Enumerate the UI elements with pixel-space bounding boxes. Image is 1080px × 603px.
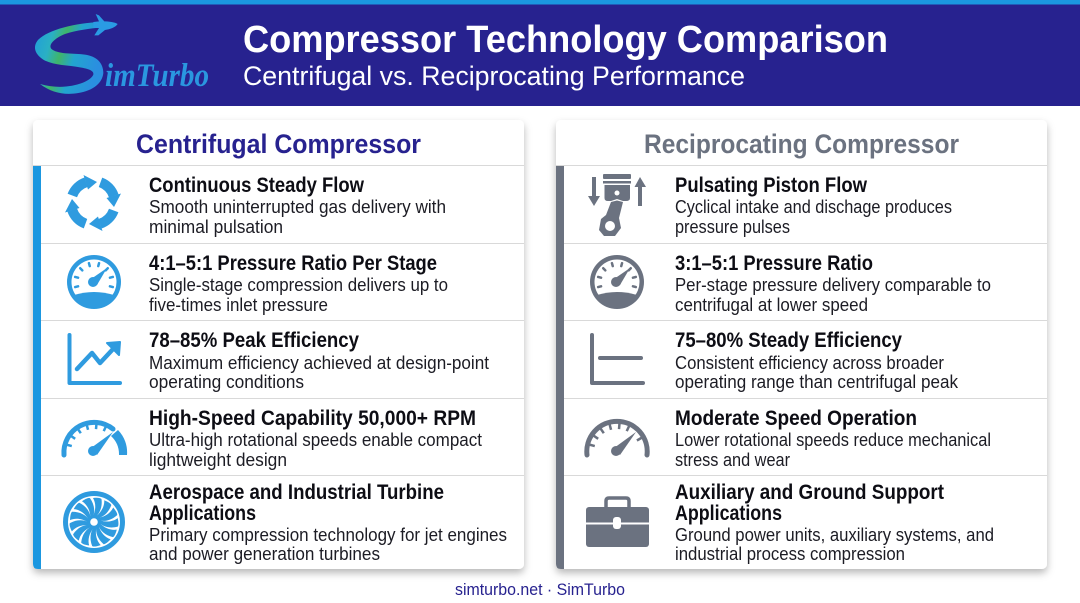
row: auxiliary applications: Auxiliary and Ground Support: [675, 481, 944, 504]
panel: centrifugal compressor: [33, 120, 524, 569]
row: auxiliary applications: Applications: [675, 502, 782, 525]
row: aerospace applications: Primary compression technology for jet engines: [149, 525, 507, 545]
row: continuous steady flow: Continuous Steady Flow: [149, 174, 365, 197]
row: steady efficiency: [592, 329, 959, 392]
row: pressure ratio: [67, 252, 448, 315]
footer: simturbo.net · SimTurbo: [455, 580, 625, 599]
row: moderate speed: Moderate Speed Operation: [675, 407, 917, 430]
row: auxiliary applications: Ground power units, auxiliary systems, and: [675, 525, 994, 545]
logo: SimTurbo: [35, 14, 209, 94]
row: pulsating piston flow: Pulsating Piston Flow: [675, 174, 868, 197]
icon: flat chart: [592, 335, 643, 383]
row: peak efficiency: 78–85% Peak Efficiency: [149, 329, 359, 352]
row: aerospace applications: and power generation turbines: [149, 544, 380, 564]
row: moderate speed: stress and wear: [675, 450, 790, 470]
row: high-speed capability: High-Speed Capability 50,000+ RPM: [149, 407, 476, 430]
logo: SimTurbo: imTurbo: [105, 58, 209, 94]
row: peak efficiency: operating conditions: [149, 372, 304, 392]
icon: circular arrows: [65, 175, 121, 231]
row: aerospace applications: Aerospace and Industrial Turbine: [149, 481, 444, 504]
row: high-speed capability: lightweight design: [149, 450, 287, 470]
icon: pressure gauge: [67, 255, 121, 309]
row: pressure ratio: centrifugal at lower speed: [675, 295, 868, 315]
icon: speedometer: [587, 421, 647, 456]
row: continuous steady flow: minimal pulsation: [149, 217, 283, 237]
row: moderate speed: Lower rotational speeds reduce mechanical: [675, 430, 991, 450]
row: steady efficiency: operating range than centrifugal peak: [675, 372, 959, 392]
row: steady efficiency: Consistent efficiency across broader: [675, 353, 944, 373]
row: pressure ratio: [590, 252, 991, 315]
row: pulsating piston flow: [588, 174, 952, 237]
row: continuous steady flow: [65, 174, 446, 237]
row: pressure ratio: 4:1–5:1 Pressure Ratio Per Stage: [149, 252, 437, 275]
subtitle: Centrifugal vs. Reciprocating Performance: [243, 61, 745, 91]
heading: reciprocating: Reciprocating Compressor: [644, 129, 959, 159]
row: pressure ratio: five-times inlet pressure: [149, 295, 328, 315]
row: pulsating piston flow: Cyclical intake and dischage produces: [675, 197, 952, 217]
heading: centrifugal: Centrifugal Compressor: [136, 129, 421, 159]
icon: turbine fan: [66, 494, 122, 550]
title: Compressor Technology Comparison: [243, 19, 888, 61]
row: pressure ratio: 3:1–5:1 Pressure Ratio: [675, 252, 873, 275]
row: auxiliary applications: industrial process compression: [675, 544, 905, 564]
row: steady efficiency: 75–80% Steady Efficiency: [675, 329, 902, 352]
row: high-speed capability: [64, 407, 482, 470]
header band: [0, 0, 1080, 106]
row: pressure ratio: Per-stage pressure delivery comparable to: [675, 275, 991, 295]
row: aerospace applications: [66, 481, 507, 564]
icon: rising chart: [70, 335, 120, 383]
row: continuous steady flow: Smooth uninterrupted gas delivery with: [149, 197, 446, 217]
icon: piston with arrows: [588, 174, 646, 236]
row: pulsating piston flow: pressure pulses: [675, 217, 790, 237]
row: peak efficiency: [70, 329, 489, 392]
row: peak efficiency: Maximum efficiency achieved at design-point: [149, 353, 489, 373]
panel: reciprocating compressor: [556, 120, 1047, 569]
icon: pressure gauge: [590, 255, 644, 309]
row: moderate speed: [587, 407, 991, 470]
row: high-speed capability: Ultra-high rotational speeds enable compact: [149, 430, 482, 450]
row: aerospace applications: Applications: [149, 502, 256, 525]
icon: speedometer: [64, 422, 127, 456]
icon: toolbox: [586, 498, 649, 547]
row: auxiliary applications: [586, 481, 994, 564]
row: pressure ratio: Single-stage compression delivers up to: [149, 275, 448, 295]
